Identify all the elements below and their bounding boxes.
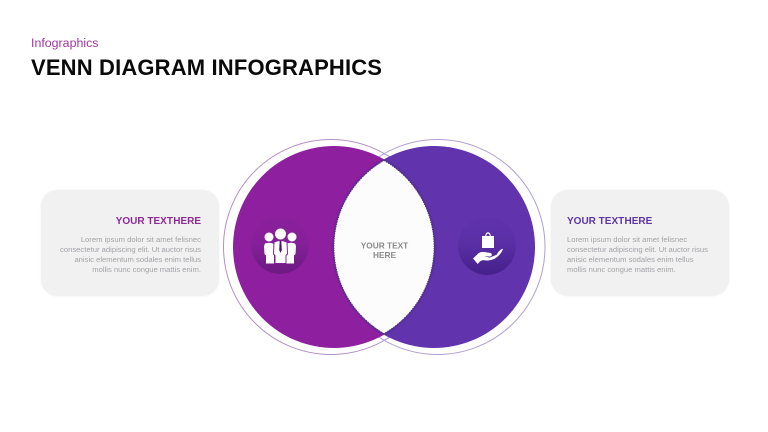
outer ring: left [224,140,438,354]
panel: right text card [551,190,729,296]
center lens overlap: HERE [373,250,396,260]
right violet circle [333,146,535,348]
panel: left text card [41,190,219,296]
right card body text: mollis nunc congue mattis enim. [567,264,676,274]
left card body text [60,234,201,274]
title: VENN DIAGRAM INFOGRAPHICS [31,54,382,80]
left card body text: anisic elementum sodales enim tellus [74,254,201,264]
right card body text: anisic elementum sodales enim tellus [567,254,694,264]
left card body text: mollis nunc congue mattis enim. [92,264,201,274]
right card body text: Lorem ipsum dolor sit amet felisnec [567,234,687,244]
center lens overlap [334,160,434,334]
center label: YOUR TEXT [361,240,408,250]
right card body text [567,234,708,274]
left purple circle [233,146,435,348]
right card body text: consectetur adipiscing elit. Ut auctor risus [567,244,708,254]
left card body text: consectetur adipiscing elit. Ut auctor risus [60,244,201,254]
icon: hand holding bag [458,217,516,275]
icon: team of people [251,216,309,274]
outer ring: right [330,140,545,354]
left card body text: Lorem ipsum dolor sit amet felisnec [81,234,201,244]
right card heading: YOUR TEXT HERE [567,216,652,227]
left card heading: YOUR TEXT HERE [116,216,201,227]
subtitle: Infographics [31,36,99,50]
